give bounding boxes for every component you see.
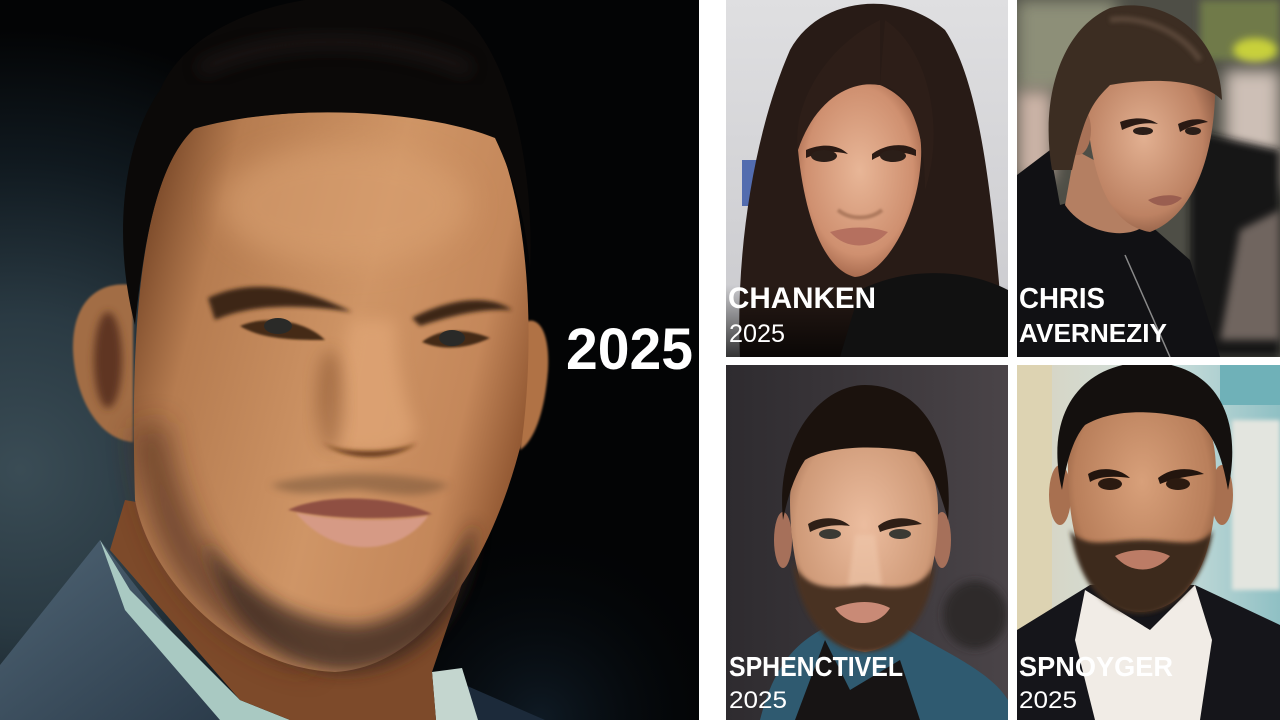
face [774, 512, 792, 568]
label: top-right portrait: CHRIS [1019, 283, 1105, 315]
label: top-left portrait [728, 282, 876, 348]
label: bottom-right portrait [1019, 651, 1173, 714]
ear [1076, 115, 1091, 155]
eyes [240, 320, 325, 340]
brows [208, 287, 352, 320]
hair [123, 109, 508, 324]
label: top-right portrait [1019, 283, 1167, 348]
label: bottom-left portrait: SPHENCTIVEL [729, 651, 903, 682]
stubble [205, 520, 475, 672]
torso [1017, 150, 1220, 357]
panel: top-right portrait [1017, 0, 1280, 357]
jacket [760, 625, 1008, 720]
face [1049, 465, 1071, 525]
panel: main portrait [0, 0, 699, 720]
label: bottom-right portrait: 2025 [1019, 687, 1077, 714]
label: bottom-left portrait: 2025 [729, 687, 787, 714]
neck and face [1065, 154, 1140, 234]
label: bottom-left portrait [729, 651, 903, 714]
hair back [739, 4, 1005, 357]
label: top-left portrait: CHANKEN [728, 282, 876, 315]
hair [1057, 362, 1232, 490]
face [798, 84, 921, 277]
jacket [0, 540, 545, 720]
hair [782, 385, 949, 520]
lips [288, 498, 432, 518]
face [123, 0, 531, 672]
nose [336, 322, 414, 450]
year label: main: 2025 [566, 317, 693, 382]
panel: top-left portrait [726, 0, 1008, 357]
label: bottom-right portrait: SPNOYGER [1019, 651, 1173, 682]
ears [73, 284, 548, 450]
jacket and shirt [1017, 585, 1280, 720]
panel: bottom-left portrait [726, 365, 1008, 720]
neck [110, 500, 470, 720]
label: top-left portrait: 2025 [729, 320, 785, 348]
label: top-right portrait: AVERNEZIY [1019, 318, 1167, 348]
panel: bottom-right portrait [1017, 362, 1280, 720]
